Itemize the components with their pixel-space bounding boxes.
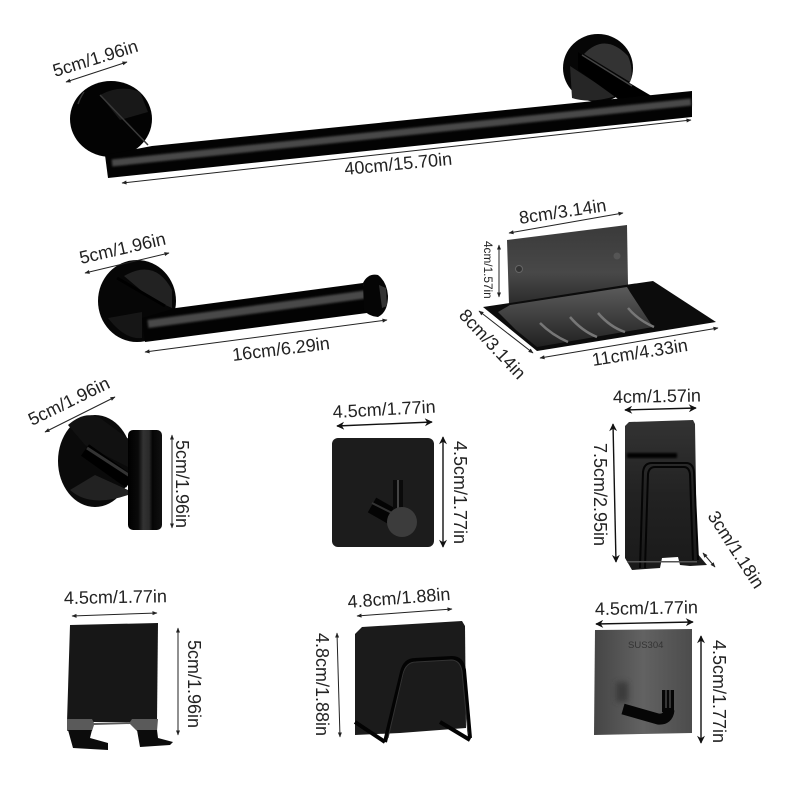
product: plate with prongs xyxy=(64,586,204,750)
soap dish length label xyxy=(540,328,718,370)
soap dish tray xyxy=(483,281,716,351)
sponge holder width label: 4.8cm/1.88in xyxy=(347,584,451,612)
product: rack with tall plate xyxy=(590,385,768,592)
brushed hook shadow xyxy=(616,682,628,702)
towel bar right mount xyxy=(563,34,655,104)
sponge holder wire highlight xyxy=(388,660,468,738)
towel bar length label xyxy=(122,120,691,183)
product: brushed square hook xyxy=(594,597,729,743)
tall plate xyxy=(625,420,707,570)
prong plate height label xyxy=(178,628,204,735)
tall plate width label: 4cm/1.57in xyxy=(613,385,701,407)
brushed plate xyxy=(594,629,692,735)
square hook plate xyxy=(332,438,434,547)
towel bar left mount xyxy=(70,81,152,157)
paper holder rod xyxy=(142,283,376,342)
foot strip xyxy=(627,561,697,562)
robe hook width label: 5cm/1.96in xyxy=(25,373,113,430)
paper holder length label xyxy=(145,320,387,365)
product: toilet paper holder xyxy=(77,229,388,365)
towel bar rod xyxy=(105,91,692,178)
soap dish depth label: 8cm/3.14in xyxy=(455,305,530,383)
robe hook height label: 5cm/1.96in xyxy=(172,440,192,528)
prong connector strips xyxy=(67,719,158,731)
brushed hook height label xyxy=(701,636,729,743)
towel bar length label: 40cm/15.70in xyxy=(343,149,453,179)
brushed hook height label: 4.5cm/1.77in xyxy=(709,640,729,743)
product: soap dish xyxy=(455,195,718,383)
paper holder mount xyxy=(98,260,176,342)
soap dish top width label: 8cm/3.14in xyxy=(518,195,608,228)
brushed hook xyxy=(623,690,674,719)
square hook arm xyxy=(372,480,417,537)
wire frame xyxy=(640,463,698,568)
soap dish back plate xyxy=(507,225,628,305)
soap dish length label: 11cm/4.33in xyxy=(590,335,689,370)
product: robe hook xyxy=(25,373,192,530)
product: towel bar xyxy=(50,34,692,183)
prong hooks xyxy=(68,730,173,750)
paper holder width label: 5cm/1.96in xyxy=(77,229,168,268)
paper holder length label: 16cm/6.29in xyxy=(231,333,331,365)
robe hook mount xyxy=(58,415,132,507)
brushed hook width label: 4.5cm/1.77in xyxy=(595,597,698,619)
soap dish height label: 4cm/1.57in xyxy=(481,241,495,299)
tall plate shadow xyxy=(627,453,677,458)
robe hook post xyxy=(128,430,162,530)
tall plate height label xyxy=(590,424,616,562)
tall plate height label: 7.5cm/2.95in xyxy=(590,443,610,546)
soap dish top width label xyxy=(509,195,623,233)
prong plate width label: 4.5cm/1.77in xyxy=(64,586,167,608)
SUS304 stamp: SUS304 xyxy=(628,640,663,651)
towel bar width label: 5cm/1.96in xyxy=(50,36,140,81)
product: square adhesive hook xyxy=(332,397,470,547)
prong plate xyxy=(67,623,158,722)
sponge holder wire xyxy=(355,658,470,742)
square hook height label xyxy=(443,437,470,547)
square hook width label: 4.5cm/1.77in xyxy=(332,397,436,422)
paper holder end cap xyxy=(363,275,388,317)
prong plate height label: 5cm/1.96in xyxy=(184,640,204,728)
sponge holder plate xyxy=(355,621,466,735)
sponge holder height label: 4.8cm/1.88in xyxy=(312,633,332,736)
product: sponge holder xyxy=(312,584,470,742)
tall plate depth label: 3cm/1.18in xyxy=(704,507,768,592)
square hook height label: 4.5cm/1.77in xyxy=(450,441,470,544)
